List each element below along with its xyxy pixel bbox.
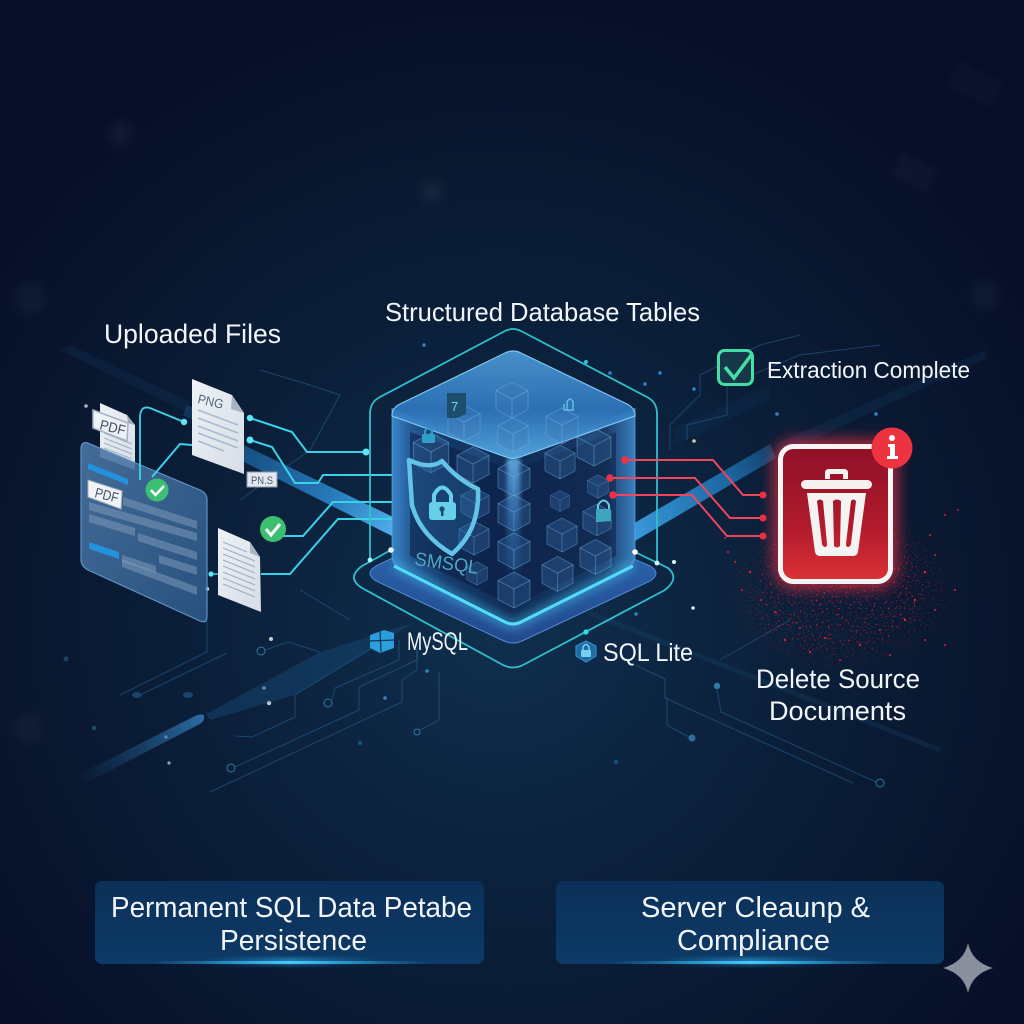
panel: file table window [81, 443, 207, 622]
background soft nodes [14, 61, 1004, 787]
database cube group [354, 297, 700, 668]
document: png [192, 379, 244, 474]
tag: png label: PN.S [251, 475, 273, 487]
card: permanent sql data persistence [95, 881, 484, 965]
label: delete source documents [756, 664, 920, 726]
light beam: cube to upper right [612, 350, 988, 552]
status: extraction complete [718, 350, 970, 384]
light beam: lower left [72, 623, 413, 782]
icon: small lock right [596, 500, 612, 522]
tag: png label [247, 472, 277, 487]
cube body [392, 408, 635, 625]
cube base plate [370, 503, 656, 643]
label: delete source documents: Delete Source [756, 664, 920, 694]
label: delete source documents: Documents [769, 696, 906, 726]
wire nodes [181, 415, 400, 577]
icon: trash can [801, 469, 872, 556]
card: server cleanup and compliance [556, 881, 944, 965]
label: sql lite: SQL Lite [603, 639, 693, 667]
icon: red trash card [780, 428, 912, 582]
card: server cleanup and compliance: Compliance [677, 925, 830, 957]
status: extraction complete: Extraction Complete [767, 357, 970, 383]
connector node highlights [368, 360, 659, 635]
card: permanent sql data persistence: Persistence [220, 925, 367, 957]
delete source documents group [606, 428, 990, 726]
cube top face [392, 351, 635, 458]
cube top face: 7 [451, 399, 458, 414]
document: back pdf: PDF [98, 416, 127, 438]
panel: file table window: PDF [93, 484, 120, 506]
label: mysql: MySQL [407, 628, 468, 656]
database table cubes [413, 428, 611, 608]
label: mysql [370, 628, 468, 656]
red wire nodes [606, 456, 766, 540]
icon: small lock left [422, 428, 435, 443]
icon: sparkle star [943, 943, 993, 993]
background circuit lines [120, 335, 880, 792]
red particle dust [724, 509, 959, 673]
connector wires [140, 407, 400, 574]
heading: uploaded files: Uploaded Files [104, 319, 281, 349]
hexagonal outline [354, 329, 673, 668]
uploaded files group [81, 319, 400, 622]
label: smsql: SMSQL [413, 549, 480, 579]
card: permanent sql data persistence: Permanent SQL Data Petabe [111, 892, 472, 924]
icon: check badge by lower page [260, 516, 286, 542]
icon: mysql grid [370, 630, 394, 653]
red connector wires [610, 460, 763, 536]
icon: check badge on panel [146, 478, 168, 502]
light beam: lower right [589, 613, 940, 750]
document: png: PNG [196, 391, 225, 412]
icon: security shield [409, 460, 478, 554]
icon: green checkbox [718, 350, 752, 384]
light beam: upper left to cube [60, 345, 414, 544]
cube bottom glow edge [392, 408, 635, 624]
card: server cleanup and compliance: Server Cleaunp & [641, 892, 870, 924]
document: lower page [218, 528, 261, 612]
document: back pdf [93, 403, 135, 470]
icon: info badge [872, 428, 912, 468]
heading: structured database tables: Structured Database Tables [385, 297, 700, 327]
icon: sql lite lock [576, 641, 596, 662]
